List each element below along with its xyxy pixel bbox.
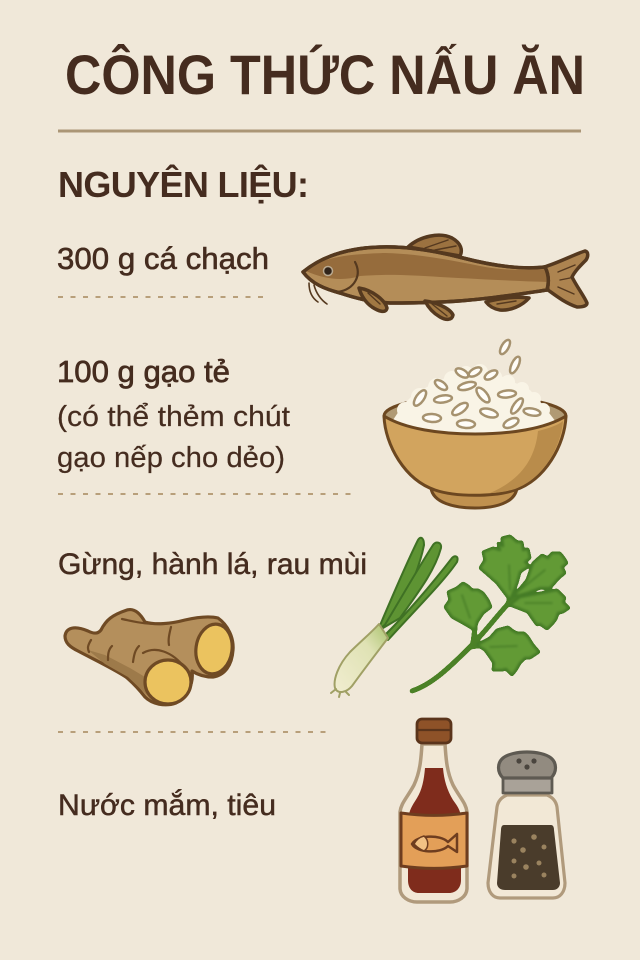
text: aromatics ingredient: Gừng, hành lá, rau mùi xyxy=(58,548,367,581)
label xyxy=(401,813,467,868)
title: CÔNG THỨC NẤU ĂN xyxy=(65,43,585,106)
leaf left xyxy=(445,583,491,630)
rice grains xyxy=(412,338,541,430)
icon: fish sauce bottle xyxy=(400,719,467,902)
shaker top xyxy=(498,752,556,778)
rear fin xyxy=(486,297,529,310)
icon: scallion xyxy=(331,538,458,697)
leaf top right xyxy=(513,553,567,597)
cap xyxy=(417,719,451,743)
stem xyxy=(412,575,545,691)
label fish xyxy=(412,834,457,852)
leaf bottom xyxy=(477,627,539,675)
pepper specks xyxy=(511,834,546,878)
bowl body xyxy=(384,416,566,495)
leaf right xyxy=(510,590,569,629)
cut end right xyxy=(193,622,235,676)
text: rice ingredient xyxy=(57,355,290,474)
ginger creases xyxy=(88,619,185,668)
cut end left xyxy=(145,660,191,704)
blade one xyxy=(378,538,424,630)
dorsal fin xyxy=(408,235,461,256)
pectoral fin xyxy=(359,288,387,311)
bowl shade xyxy=(490,421,563,493)
bowl rim back xyxy=(384,396,566,436)
sauce xyxy=(408,768,461,893)
icon: fish xyxy=(303,235,588,319)
barbels xyxy=(309,283,327,304)
fin rays xyxy=(368,240,575,316)
belly fin xyxy=(425,301,453,319)
scallion bulb xyxy=(335,624,388,692)
text: seasoning ingredient: Nước mắm, tiêu xyxy=(58,789,276,822)
pepper xyxy=(497,825,560,890)
icon: cilantro xyxy=(412,536,569,691)
bottle glass xyxy=(400,744,467,902)
text: rice ingredient: 100 g gạo tẻ xyxy=(57,355,230,389)
tail xyxy=(544,251,588,307)
ginger shading xyxy=(88,650,150,698)
bowl foot xyxy=(431,488,517,508)
heading: ingredients: NGUYÊN LIỆU: xyxy=(58,163,309,205)
gill xyxy=(338,262,358,292)
back band xyxy=(306,253,549,282)
shaker collar xyxy=(503,778,552,793)
eye xyxy=(324,266,332,276)
body xyxy=(303,247,548,303)
rice mound xyxy=(393,364,556,434)
icon: pepper shaker xyxy=(488,752,565,898)
ginger body xyxy=(65,610,233,705)
shaker glass xyxy=(488,795,565,898)
leaf top xyxy=(480,536,530,600)
blade two xyxy=(383,543,441,628)
text: rice ingredient: gạo nếp cho dẻo) xyxy=(57,442,285,474)
text: rice ingredient: (có thể thẻm chút xyxy=(57,401,290,433)
leaf veins xyxy=(462,565,552,647)
icon: ginger xyxy=(65,610,235,705)
text: fish ingredient: 300 g cá chạch xyxy=(57,241,269,276)
icon: rice bowl xyxy=(384,338,566,508)
blade three xyxy=(385,556,458,640)
